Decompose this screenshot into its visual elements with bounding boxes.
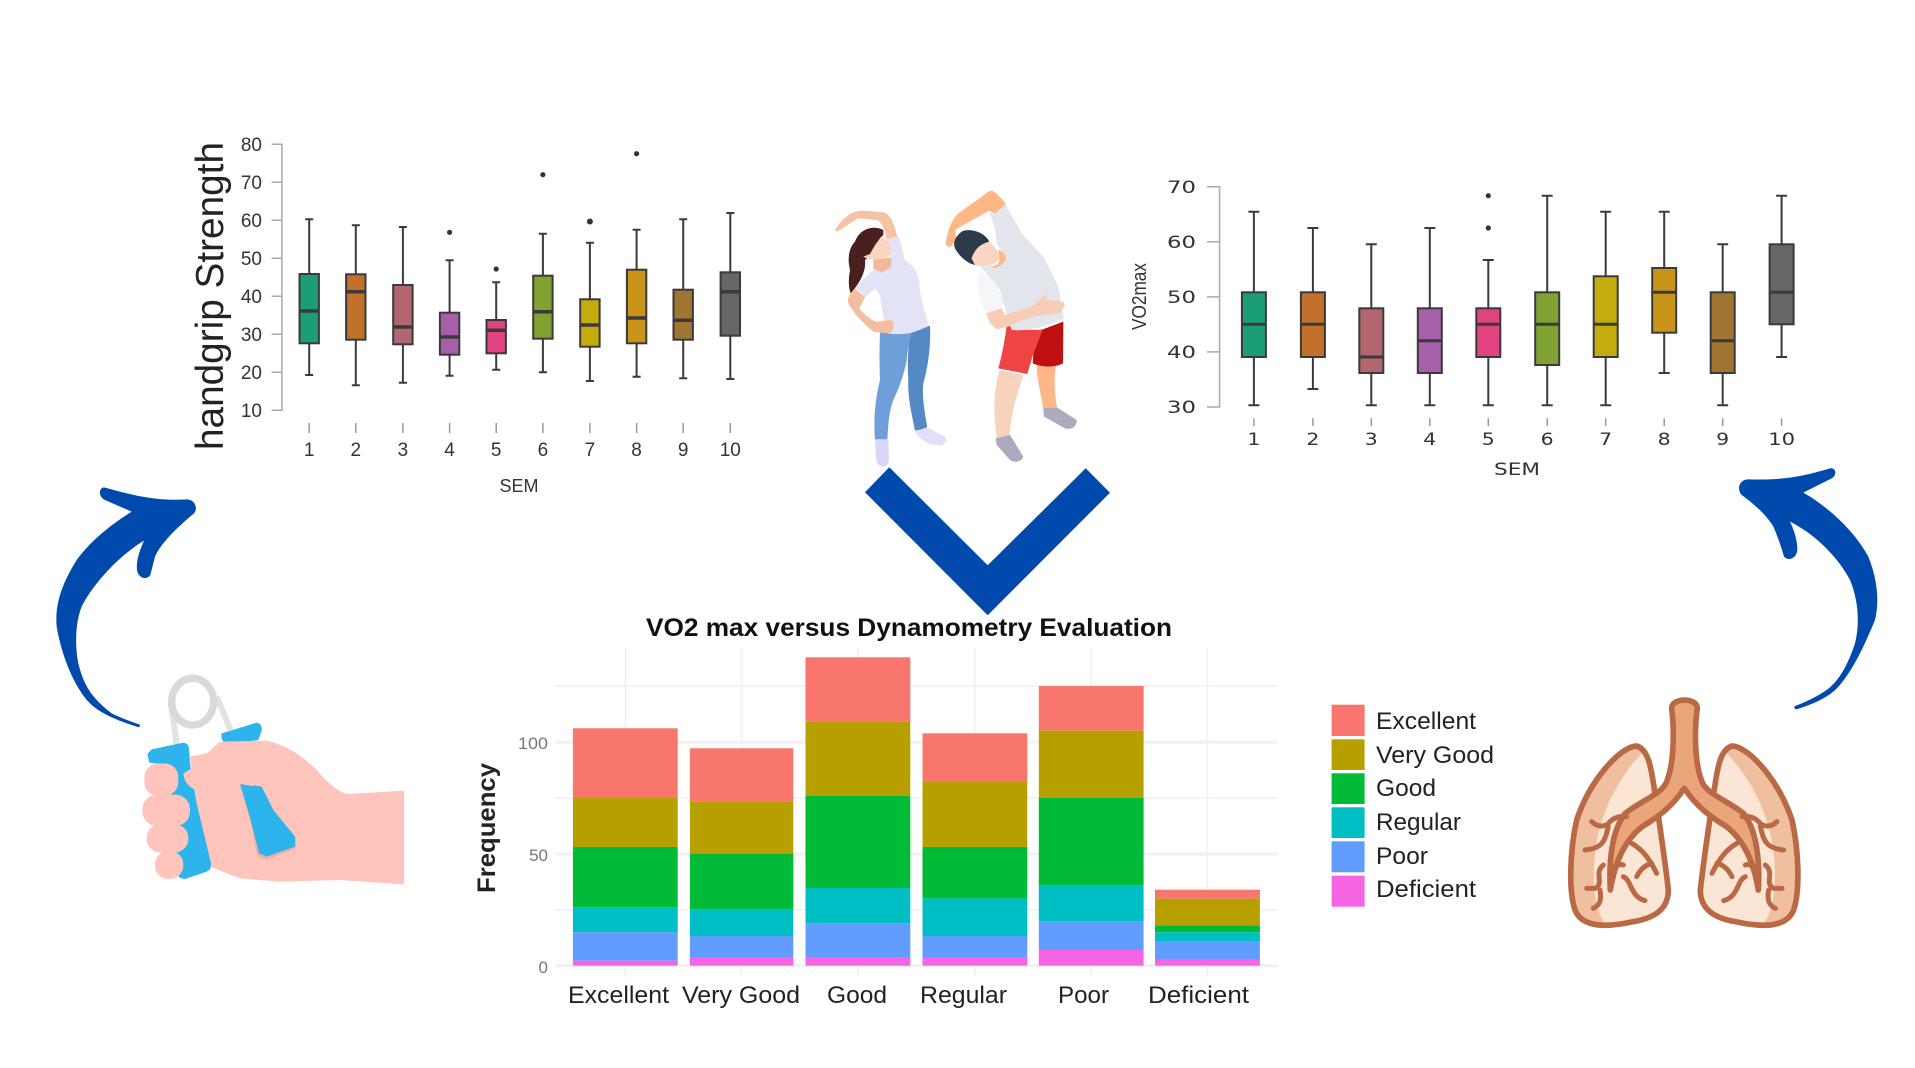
bar: Good (806, 657, 910, 966)
legend: Deficient (1376, 876, 1476, 903)
boxes (1242, 196, 1794, 405)
x axis ticks and labels: 10 (720, 440, 741, 461)
legend (1332, 705, 1494, 907)
y axis labels: 0 (539, 958, 548, 977)
x axis ticks and labels: 6 (1541, 430, 1554, 450)
man (946, 191, 1077, 462)
y axis labels: 50 (529, 846, 548, 865)
x axis ticks and labels: 2 (1306, 430, 1319, 450)
x axis ticks and labels: 3 (398, 440, 408, 461)
x axis ticks and labels: 8 (1658, 430, 1671, 450)
legend: Poor (1376, 843, 1428, 870)
y axis title: handgrip Strength: handgrip Strength (189, 142, 232, 450)
y axis labels (518, 734, 548, 977)
bar: Poor (1039, 686, 1144, 966)
x axis ticks and labels: 10 (1768, 430, 1795, 450)
chart: stacked bar VO2 max versus Dynamometry (473, 614, 1494, 1009)
legend: Very Good (1376, 742, 1494, 769)
right bronchioles (1712, 816, 1784, 908)
x axis labels: Very Good (682, 982, 800, 1009)
outliers (1486, 193, 1491, 231)
grid (556, 648, 1278, 977)
x axis ticks and labels: 5 (1482, 430, 1495, 450)
x axis ticks and labels: 2 (351, 440, 361, 461)
x axis ticks and labels: 9 (678, 440, 688, 461)
legend: Excellent (1376, 708, 1476, 735)
trachea and bronchi (1610, 700, 1759, 890)
x axis labels (568, 982, 1249, 1009)
arrow: chevron pointing down (865, 467, 1110, 615)
thumb (183, 743, 253, 790)
y axis with ticks: 40 (1167, 343, 1196, 363)
x axis ticks and labels: 3 (1365, 430, 1378, 450)
grip lower right handle (239, 783, 296, 860)
bar: Very Good (690, 748, 793, 966)
y axis with ticks: 40 (241, 287, 262, 308)
palm and forearm (190, 741, 404, 884)
y axis labels: 100 (518, 734, 548, 753)
y axis with ticks: 70 (241, 173, 262, 194)
y axis with ticks: 80 (241, 135, 262, 156)
y axis with ticks: 50 (241, 249, 262, 270)
x axis labels: Poor (1058, 982, 1109, 1009)
icon: lungs (1571, 700, 1798, 925)
arrow: right curved arrow (1739, 468, 1877, 709)
y axis with ticks (1167, 178, 1220, 418)
x axis ticks and labels: 9 (1716, 430, 1729, 450)
fingers (142, 763, 190, 879)
x axis ticks and labels: 5 (491, 440, 501, 461)
x axis ticks and labels: 4 (1423, 430, 1436, 450)
y axis with ticks (241, 135, 282, 422)
bar: Regular (922, 733, 1027, 966)
gripper spring (171, 678, 231, 745)
chart: VO2max box plot (1129, 178, 1795, 480)
bar: Deficient (1155, 890, 1260, 966)
x axis ticks and labels: 4 (444, 440, 455, 461)
y axis with ticks: 60 (241, 211, 262, 232)
bar: Excellent (573, 728, 678, 966)
x axis ticks and labels: 1 (1247, 430, 1260, 450)
x axis ticks and labels (304, 423, 741, 496)
y axis title: VO2max: VO2max (1129, 263, 1151, 330)
illustration: two people stretching (835, 191, 1077, 467)
y axis with ticks: 10 (241, 401, 262, 422)
right lung (1700, 746, 1798, 925)
icon: hand squeezing grip dynamometer (142, 678, 404, 884)
y axis with ticks: 30 (1167, 398, 1196, 418)
x axis labels: Deficient (1148, 982, 1249, 1009)
x axis ticks and labels: 7 (585, 440, 595, 461)
legend: Good (1376, 775, 1436, 802)
y axis with ticks: 70 (1167, 178, 1196, 198)
woman (835, 211, 946, 467)
x axis ticks and labels: 7 (1599, 430, 1612, 450)
chart: handgrip strength box plot (189, 135, 741, 496)
x axis ticks and labels: 8 (631, 440, 642, 461)
x axis ticks and labels: SEM (1494, 460, 1540, 480)
boxes (300, 213, 740, 385)
left lung (1571, 746, 1668, 925)
y axis with ticks: 20 (241, 363, 262, 384)
x axis ticks and labels: 6 (538, 440, 548, 461)
y axis with ticks: 60 (1167, 233, 1196, 253)
x axis ticks and labels: 1 (304, 440, 314, 461)
x axis labels: Excellent (568, 982, 669, 1009)
x axis labels: Regular (920, 982, 1007, 1009)
x axis labels: Good (827, 982, 887, 1009)
legend: Regular (1376, 809, 1461, 836)
x axis ticks and labels: SEM (499, 476, 539, 496)
y axis title: Frequency: Frequency (473, 763, 501, 893)
outliers (447, 151, 639, 272)
grip left handle (147, 743, 211, 879)
grip upper right handle (221, 723, 262, 745)
x axis ticks and labels (1247, 418, 1795, 480)
y axis with ticks: 30 (241, 325, 262, 346)
arrow: left curved arrow (56, 487, 196, 727)
left bronchioles (1585, 816, 1657, 908)
chart title: VO2 max versus Dynamometry Evaluation (646, 614, 1172, 642)
y axis with ticks: 50 (1167, 288, 1196, 308)
